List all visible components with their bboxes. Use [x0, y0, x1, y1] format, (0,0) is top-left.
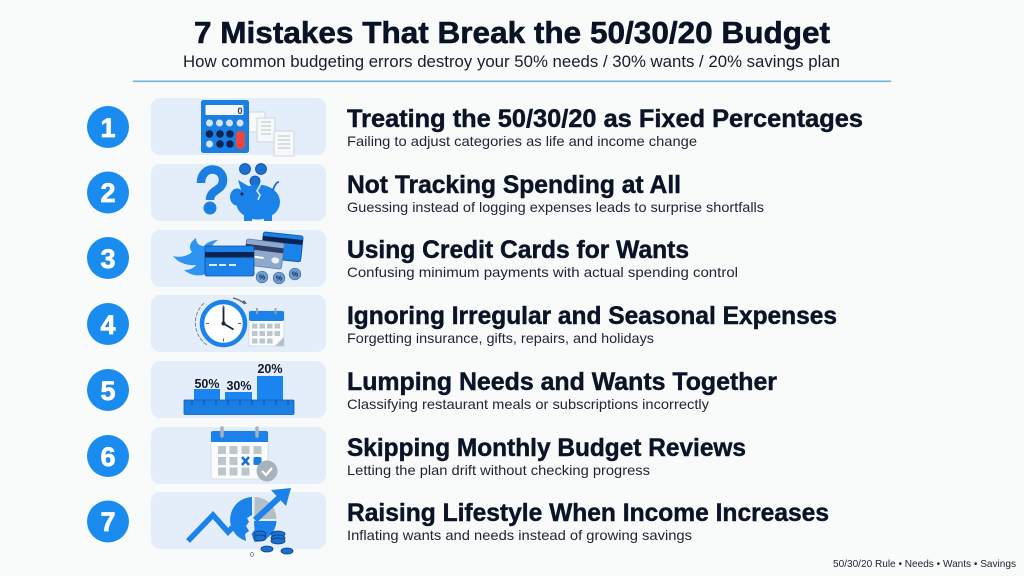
number badge 1: [87, 106, 129, 148]
footer tagline: 50/30/20 Rule • Needs • Wants • Savings: [833, 558, 1016, 570]
number badge 4: [87, 303, 129, 345]
icon: flaming credit cards: %: [259, 274, 266, 282]
number badge 4: 4: [100, 310, 116, 340]
panel: mistake 6: [87, 427, 746, 484]
description 1: Failing to adjust categories as life and income change: [347, 133, 697, 149]
title: 7 Mistakes That Break the 50/30/20 Budget: [194, 15, 830, 50]
number badge 2: [87, 172, 129, 214]
icon: flaming credit cards: %: [292, 272, 299, 278]
subtitle: How common budgeting errors destroy your 50% needs / 30% wants / 20% savings plan: [183, 53, 840, 71]
description 5: Classifying restaurant meals or subscriptions incorrectly: [347, 396, 709, 412]
icon: 50/30/20 bars on ruler: 20%: [257, 362, 283, 376]
icon: clock and calendar: [195, 298, 284, 346]
number badge 7: [87, 500, 129, 542]
panel: mistake 2: [87, 164, 764, 221]
number badge 7: 7: [100, 507, 116, 537]
panel: mistake 5: [87, 361, 777, 418]
number badge 5: 5: [100, 376, 116, 406]
panel: mistake 4: [87, 295, 837, 352]
icon: 50/30/20 bars on ruler: 50%: [194, 377, 220, 391]
number badge 6: 6: [100, 442, 116, 472]
panel: mistake 3: [87, 230, 738, 287]
heading 2: Not Tracking Spending at All: [347, 171, 681, 199]
icon: question mark and piggy bank: [201, 164, 280, 221]
heading 6: Skipping Monthly Budget Reviews: [347, 434, 746, 462]
description 7: Inflating wants and needs instead of growing savings: [347, 527, 692, 543]
number badge 3: [87, 237, 129, 279]
number badge 3: 3: [100, 244, 116, 274]
icon: 50/30/20 bars on ruler: 30%: [226, 379, 252, 393]
heading 7: Raising Lifestyle When Income Increases: [347, 499, 829, 527]
description 6: Letting the plan drift without checking progress: [347, 462, 650, 478]
icon: flaming credit cards: %: [276, 276, 283, 282]
heading 4: Ignoring Irregular and Seasonal Expenses: [347, 302, 837, 330]
icon: calculator and receipts: 0: [237, 106, 243, 116]
description 2: Guessing instead of logging expenses leads to surprise shortfalls: [347, 199, 764, 215]
number badge 2: 2: [100, 178, 116, 208]
number badge 1: 1: [100, 113, 116, 143]
icon: 50/30/20 bars on ruler: [184, 362, 294, 414]
panel: mistake 1: [87, 98, 863, 156]
icon: calculator and receipts: [201, 100, 294, 156]
icon: rising arrow, broken pie and coins: 0: [250, 552, 254, 559]
icon: rising arrow, broken pie and coins: [188, 488, 293, 559]
panel: mistake 7: [87, 488, 829, 559]
icon: calendar with checkmark: [211, 428, 278, 482]
icon: flaming credit cards: [173, 232, 303, 284]
number badge 5: [87, 369, 129, 411]
heading 1: Treating the 50/30/20 as Fixed Percentages: [347, 105, 863, 133]
heading 5: Lumping Needs and Wants Together: [347, 368, 777, 396]
number badge 6: [87, 435, 129, 477]
description 4: Forgetting insurance, gifts, repairs, and holidays: [347, 330, 654, 346]
description 3: Confusing minimum payments with actual spending control: [347, 264, 738, 280]
heading 3: Using Credit Cards for Wants: [347, 236, 689, 264]
